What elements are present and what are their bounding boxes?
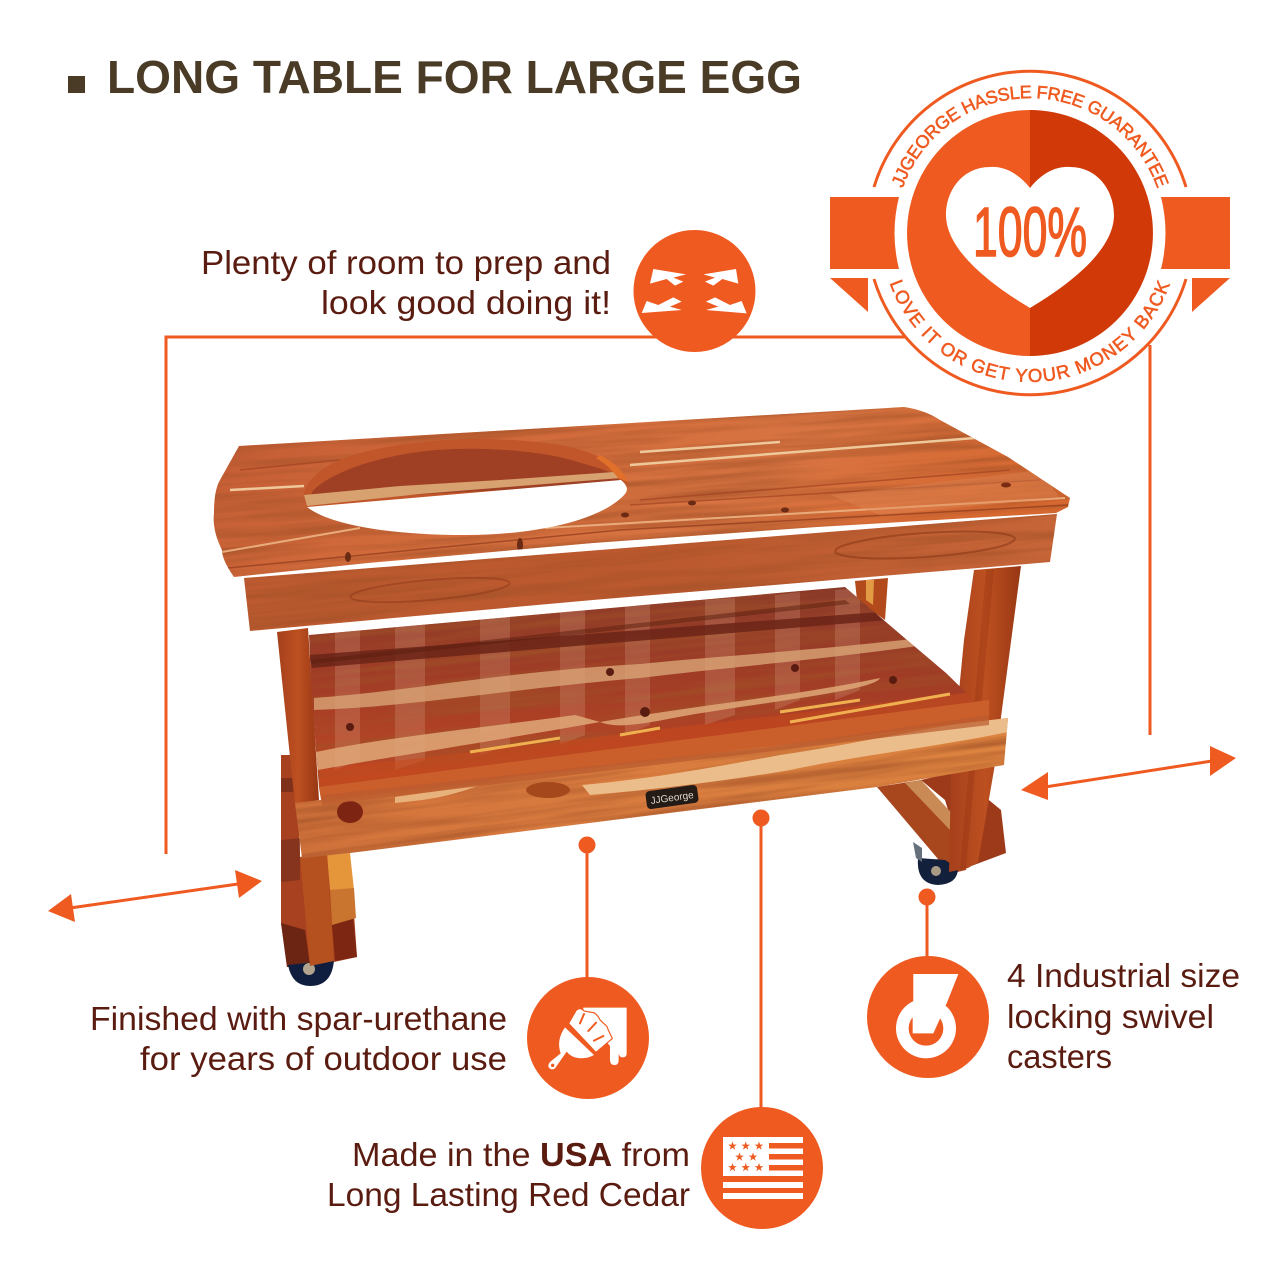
left caster — [288, 960, 334, 986]
callout connector: width line — [166, 337, 906, 854]
badge bottom text: LOVE IT OR GET YOUR MONEY BACK — [890, 279, 1170, 382]
text: finish: for years of outdoor use — [140, 1040, 507, 1077]
icon: paint brush — [527, 977, 649, 1099]
icon: expand arrows — [634, 230, 756, 352]
rear left side board — [281, 755, 357, 967]
text: USA — [327, 1136, 690, 1213]
lower front rail — [295, 715, 1008, 858]
text: USA: Long Lasting Red Cedar — [327, 1176, 690, 1213]
arrow: right dimension — [1021, 746, 1236, 800]
text: prep room — [201, 244, 611, 321]
text: finish — [90, 1000, 507, 1077]
JJGeorge plaque — [645, 784, 699, 810]
lower shelf — [309, 587, 975, 800]
badge 100 percent: 100% — [973, 193, 1087, 271]
text: casters: casters — [1007, 1038, 1112, 1075]
text: casters — [1007, 957, 1240, 1075]
right front leg — [949, 566, 1021, 872]
icon: flag — [701, 1107, 823, 1229]
title: LONG TABLE FOR LARGE EGG — [107, 51, 802, 103]
icon: caster wheel — [867, 956, 989, 1078]
callout: prep room — [201, 230, 756, 352]
text: prep room: Plenty of room to prep and — [201, 244, 611, 281]
text: casters: 4 Industrial size — [1007, 957, 1240, 994]
shelf board edge highlight — [322, 715, 989, 805]
shelf front board — [319, 700, 989, 805]
back right leg — [855, 578, 888, 620]
text: finish: Finished with spar-urethane — [90, 1000, 507, 1037]
callout connector: depth line — [1148, 345, 1152, 735]
reflections — [335, 588, 860, 770]
guarantee badge — [830, 70, 1230, 396]
badge ribbons — [830, 197, 1230, 312]
icon: heart — [946, 167, 1114, 308]
table top surface — [214, 407, 1070, 577]
connector and dot — [578, 836, 596, 980]
left upper leg — [277, 628, 319, 805]
callout: casters — [867, 888, 1240, 1078]
cedar table illustration — [173, 338, 1117, 986]
left lower leg — [300, 853, 334, 966]
callout: finish — [90, 836, 649, 1099]
right side runner — [877, 772, 1006, 875]
right caster — [913, 842, 958, 885]
callout: made in USA — [327, 810, 823, 1229]
egg cutout — [304, 439, 629, 535]
table apron — [244, 514, 1057, 631]
text: prep room: look good doing it! — [321, 284, 611, 321]
badge top text: JJGEORGE HASSLE FREE GUARANTEE — [892, 85, 1169, 188]
connector and dot — [918, 888, 936, 958]
text: casters: locking swivel — [1007, 998, 1214, 1035]
badge outer ring — [874, 71, 1186, 395]
badge circle — [907, 110, 1153, 356]
connector and dot — [752, 810, 770, 1110]
JJGeorge plaque: JJGeorge — [650, 790, 695, 807]
text: USA: Made in the USA from — [352, 1136, 690, 1173]
arrow: left dimension — [48, 870, 262, 922]
